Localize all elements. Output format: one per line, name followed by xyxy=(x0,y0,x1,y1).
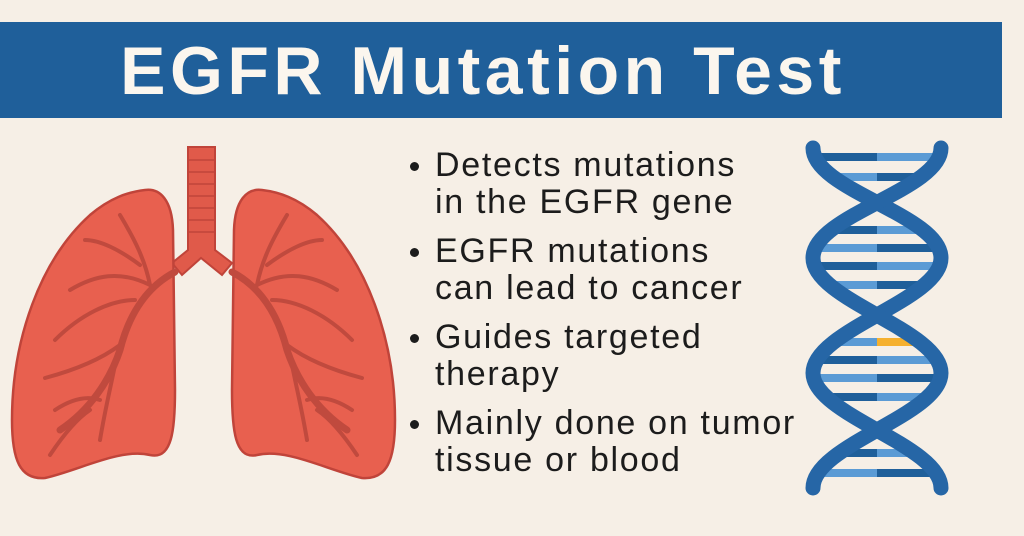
strands xyxy=(813,148,941,488)
title banner xyxy=(0,22,1002,118)
bullet 3: Guides targeted xyxy=(435,318,702,356)
rungs xyxy=(813,157,941,473)
bullet 2: EGFR mutations xyxy=(435,232,710,270)
bullet 4: Mainly done on tumor xyxy=(435,404,796,442)
bullet 3: therapy xyxy=(435,355,560,393)
left lung xyxy=(12,190,175,478)
bullet list xyxy=(410,146,796,479)
bullet 1 xyxy=(408,147,828,221)
illustration: lungs xyxy=(10,146,396,480)
title: EGFR Mutation Test xyxy=(120,33,846,109)
bullet 2: can lead to cancer xyxy=(435,269,743,307)
bullet 1: in the EGFR gene xyxy=(435,183,734,221)
trachea xyxy=(172,147,232,275)
bullet 4: tissue or blood xyxy=(435,441,682,479)
right lung xyxy=(232,190,395,478)
bullet 3 xyxy=(408,319,828,393)
bullet 1: Detects mutations xyxy=(435,146,736,184)
bullet 2 xyxy=(408,233,828,307)
bullet 4 xyxy=(408,405,828,479)
